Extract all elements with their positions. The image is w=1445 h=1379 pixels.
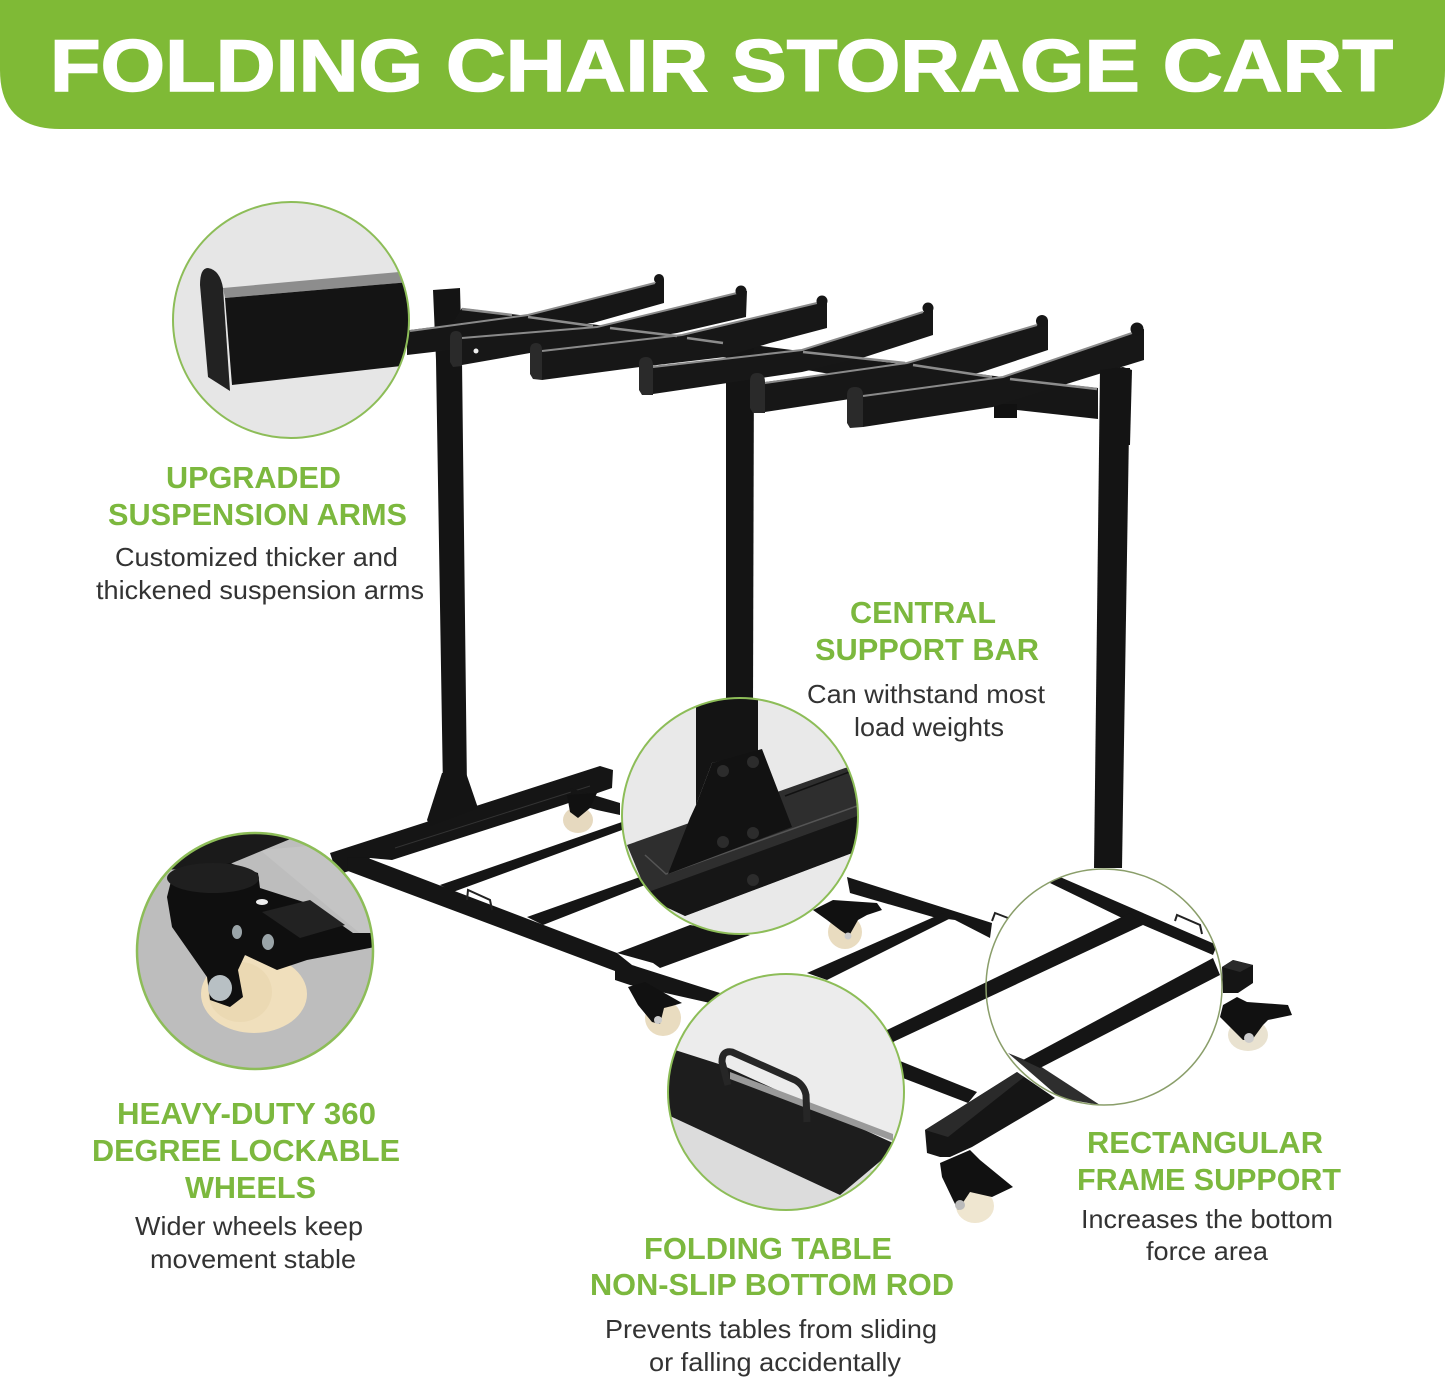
text: rectangular frame support: Increases the bottom	[1081, 1204, 1333, 1234]
text: non-slip bottom rod: Prevents tables from sliding	[605, 1314, 937, 1344]
suspension arm 2	[450, 286, 747, 367]
text: upgraded suspension arms: thickened suspension arms	[96, 575, 424, 605]
detail circle: caster wheel	[137, 830, 380, 1069]
suspension arm 4	[639, 302, 934, 395]
detail circle: rectangular frame	[887, 869, 1222, 1105]
text: upgraded suspension arms: UPGRADED	[166, 460, 341, 495]
text: central support bar: SUPPORT BAR	[815, 632, 1039, 667]
caster: rear right	[1220, 997, 1292, 1051]
detail circle: non-slip bottom rod	[660, 974, 904, 1220]
text: central support bar: Can withstand most	[807, 679, 1046, 709]
detail circle: central support bar	[622, 690, 860, 934]
text: lockable wheels	[92, 1096, 400, 1274]
text: central support bar: load weights	[854, 712, 1004, 742]
back beam	[453, 308, 1098, 419]
storage cart frame	[330, 274, 1292, 1223]
text: central support bar: CENTRAL	[850, 595, 996, 630]
text: upgraded suspension arms	[96, 460, 424, 605]
text: lockable wheels: WHEELS	[185, 1170, 316, 1205]
caster: rear left	[563, 793, 597, 833]
text: rectangular frame support: force area	[1146, 1236, 1269, 1266]
base frame	[330, 766, 1253, 1157]
right post top bracket	[1100, 367, 1132, 445]
text: rectangular frame support: FRAME SUPPORT	[1077, 1162, 1341, 1197]
caster: front right	[940, 1150, 1013, 1223]
text: rectangular frame support: RECTANGULAR	[1087, 1125, 1323, 1160]
text: upgraded suspension arms: Customized thicker and	[115, 542, 398, 572]
text: lockable wheels: DEGREE LOCKABLE	[92, 1133, 400, 1168]
text: non-slip bottom rod: NON-SLIP BOTTOM ROD	[590, 1267, 954, 1302]
suspension arm 6	[847, 322, 1144, 428]
text: central support bar	[807, 595, 1046, 742]
text: non-slip bottom rod: FOLDING TABLE	[644, 1231, 892, 1266]
suspension arm 5	[750, 315, 1048, 413]
text: non-slip bottom rod	[590, 1231, 954, 1377]
text: rectangular frame support	[1077, 1125, 1341, 1266]
cross beam highlights	[462, 309, 1097, 389]
small handle: left	[467, 890, 492, 910]
detail circle: suspension arm	[173, 202, 410, 438]
text: non-slip bottom rod: or falling accidentally	[649, 1347, 901, 1377]
text: lockable wheels: HEAVY-DUTY 360	[117, 1096, 376, 1131]
small handle: right	[992, 913, 1008, 921]
title: FOLDING CHAIR STORAGE CART	[50, 26, 1393, 107]
caster: rear center	[813, 900, 882, 949]
text: lockable wheels: Wider wheels keep	[135, 1211, 363, 1241]
text: lockable wheels: movement stable	[150, 1244, 356, 1274]
suspension arm 3	[530, 296, 828, 380]
title banner	[0, 0, 1445, 129]
suspension arm 1	[407, 274, 664, 355]
posts	[427, 288, 1130, 868]
text: upgraded suspension arms: SUSPENSION ARMS	[108, 497, 407, 532]
caster: front center	[628, 982, 682, 1036]
